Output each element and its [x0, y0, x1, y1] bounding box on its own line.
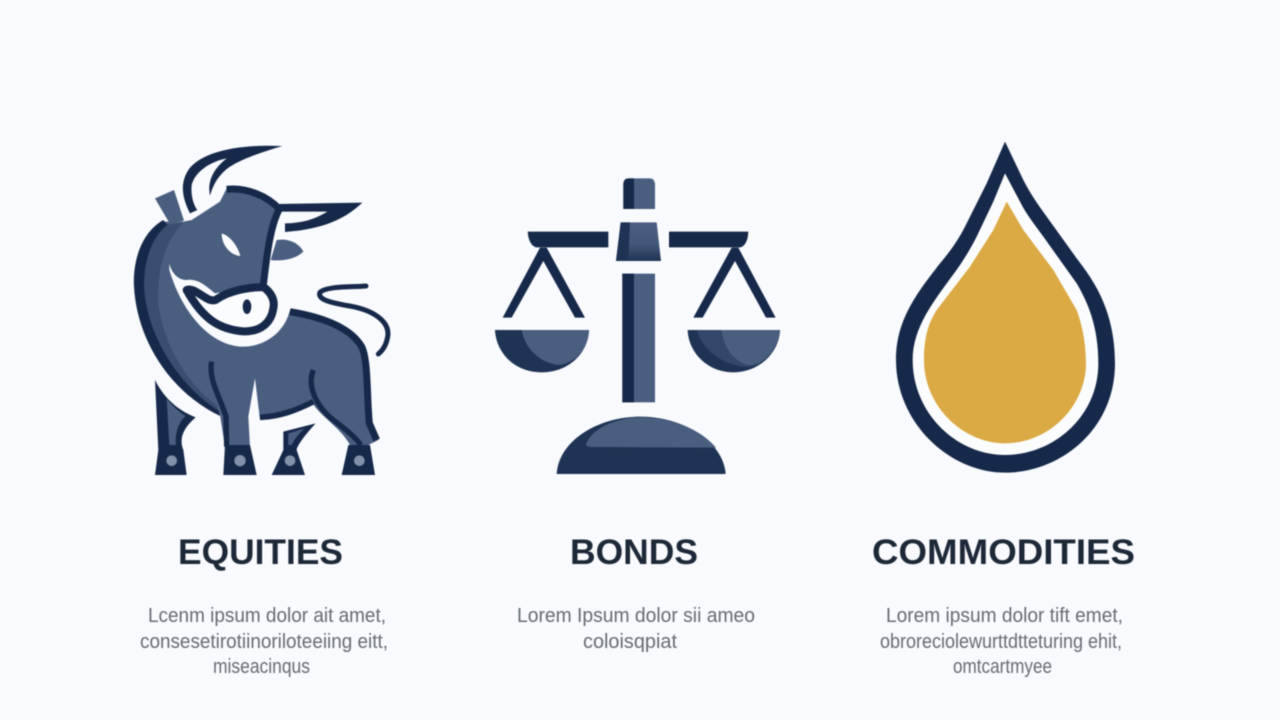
scale collar [616, 222, 661, 261]
bull outlines [211, 189, 377, 447]
text block: bonds description: Lorem Ipsum dolor sii ameo [517, 605, 755, 627]
drop inner gap [913, 173, 1098, 455]
text block: bonds description [517, 605, 755, 653]
panel: commodities [872, 142, 1135, 678]
text block: equities description: Lcenm ipsum dolor ait amet, [148, 605, 386, 627]
bull foot front [223, 445, 257, 475]
bull neck shading band [141, 223, 218, 413]
scale hanger left [503, 248, 585, 318]
text block: equities description: miseacinqus [213, 656, 310, 678]
text block: equities description: consesetirotiinoriloteeiing eitt, [140, 631, 388, 653]
scale beam left [528, 232, 608, 247]
icon: bull [134, 146, 388, 475]
bull muzzle tip [271, 240, 303, 260]
bull ear [155, 190, 184, 224]
text block: commodities description: obroreciolewurttdtteturing ehit, [880, 631, 1122, 653]
scale post top [623, 178, 655, 209]
bull horn right [278, 203, 362, 232]
heading: bonds: BONDS [570, 533, 698, 572]
scale hanger right [693, 248, 776, 318]
heading: commodities: COMMODITIES [872, 533, 1135, 572]
text block: commodities description: omtcartmyee [953, 656, 1052, 678]
panel: bonds [495, 178, 780, 653]
bull leg back left [155, 380, 196, 475]
bull leg back right [272, 423, 316, 475]
icon: oil drop [896, 142, 1115, 473]
text block: bonds description: coloisqpiat [583, 631, 677, 653]
scale beam right [669, 232, 748, 247]
scale base [557, 417, 726, 474]
heading: equities: EQUITIES [178, 533, 343, 572]
bull back outline [134, 220, 220, 416]
drop outline [896, 142, 1115, 473]
scale pan left [495, 330, 589, 372]
bull hoof dots [166, 455, 365, 466]
scale post [622, 274, 655, 402]
bull eye [222, 233, 240, 256]
scale pan right [688, 330, 780, 372]
bull tail [320, 286, 388, 354]
text block: commodities description: Lorem ipsum dolor tift emet, [886, 605, 1123, 627]
text block: commodities description [880, 605, 1123, 678]
drop gold fill [924, 202, 1086, 443]
bull muzzle [187, 287, 274, 331]
panel: equities [134, 146, 388, 678]
icon: balance scale [495, 178, 780, 474]
bull nostril [243, 299, 251, 314]
text block: equities description [140, 605, 388, 678]
bull body [135, 188, 378, 447]
bull horn left [183, 146, 282, 213]
bull foot rear [342, 445, 375, 475]
